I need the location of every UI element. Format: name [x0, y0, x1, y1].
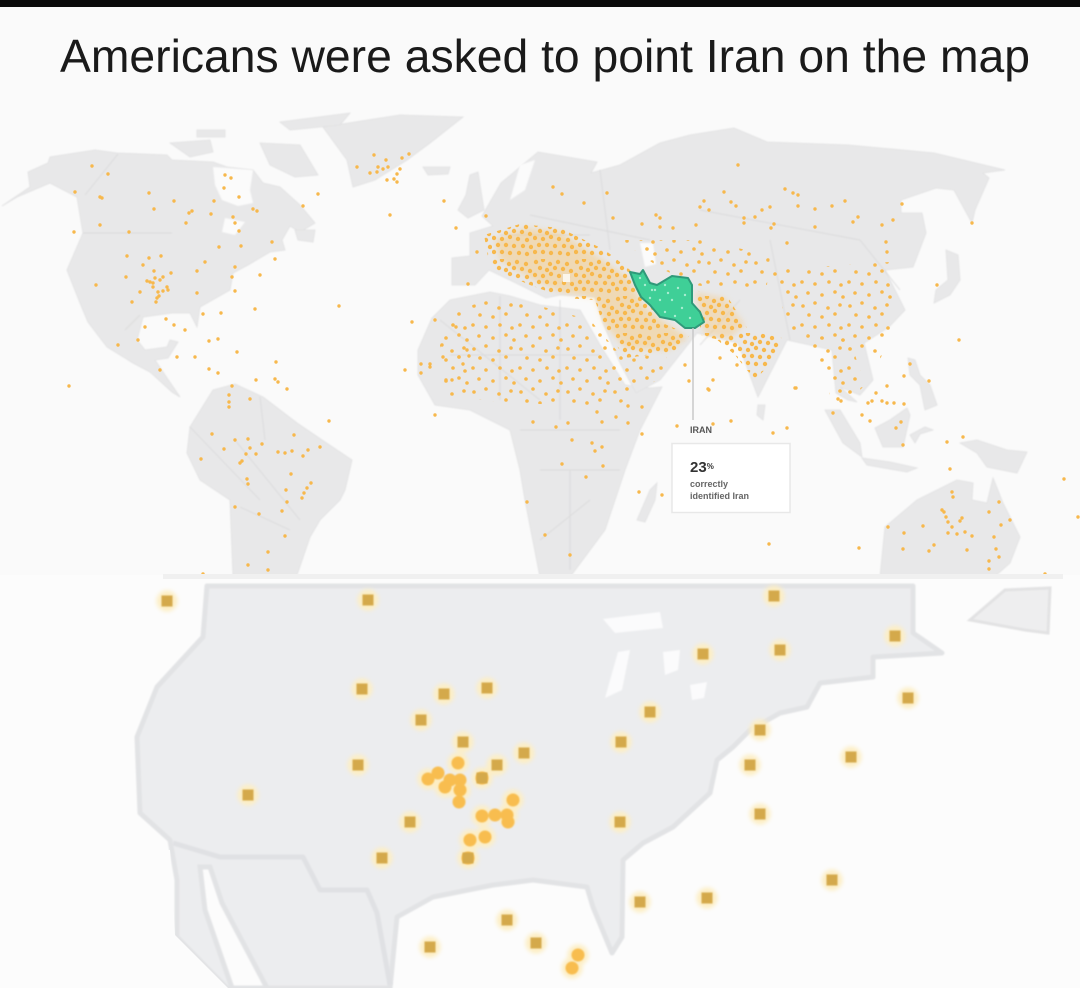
west of Baja white	[140, 850, 228, 988]
dots: individual respondents	[69, 154, 1078, 574]
callout: 23% correctly identified Iran: correctly	[690, 479, 728, 489]
seam band	[163, 574, 1063, 579]
dots: North Africa and Arabia	[440, 300, 668, 410]
callout: 23% correctly identified Iran: %	[707, 462, 714, 471]
panel background	[0, 575, 1080, 988]
dots: east of Iran	[693, 290, 747, 342]
dots: South Asia	[716, 333, 782, 378]
leader line to Iran label	[692, 328, 694, 420]
dot fields	[69, 154, 1078, 574]
dots: Central Asia	[620, 240, 770, 290]
inland seas	[213, 160, 656, 267]
Mexico border line	[173, 843, 390, 985]
halos	[167, 596, 908, 968]
land masses	[2, 113, 1027, 578]
callout: 23% correctly identified Iran: 23	[690, 459, 707, 476]
Iran label: IRAN	[690, 425, 712, 435]
dots: mainland Southeast Asia	[806, 335, 863, 395]
country borders	[482, 230, 900, 518]
Nova Scotia fragment	[970, 588, 1050, 633]
title: Americans were asked to point Iran on the map	[60, 30, 1030, 82]
dots: Europe cluster	[484, 224, 690, 358]
dots: China and Himalaya	[770, 262, 895, 360]
Iran highlighted in green	[630, 270, 704, 328]
black top bar	[0, 0, 1080, 7]
underlay: east of Iran	[695, 292, 745, 338]
zoomed panel: United States	[0, 574, 1080, 988]
dots over Iran	[640, 278, 690, 318]
dots zoomed	[167, 596, 908, 947]
underlay: Europe and Middle East	[495, 228, 688, 350]
callout: 23% correctly identified Iran: identified Iran	[690, 491, 749, 501]
great lakes	[603, 612, 707, 700]
northern border line	[235, 596, 570, 604]
Baja strip white gap	[200, 867, 267, 988]
callout: 23% correctly identified Iran	[672, 444, 790, 512]
US and Mexico land zoomed	[137, 586, 942, 988]
world map	[2, 113, 1078, 578]
orange cluster dots	[428, 763, 578, 968]
white gap: Black Sea fragment	[563, 274, 570, 282]
